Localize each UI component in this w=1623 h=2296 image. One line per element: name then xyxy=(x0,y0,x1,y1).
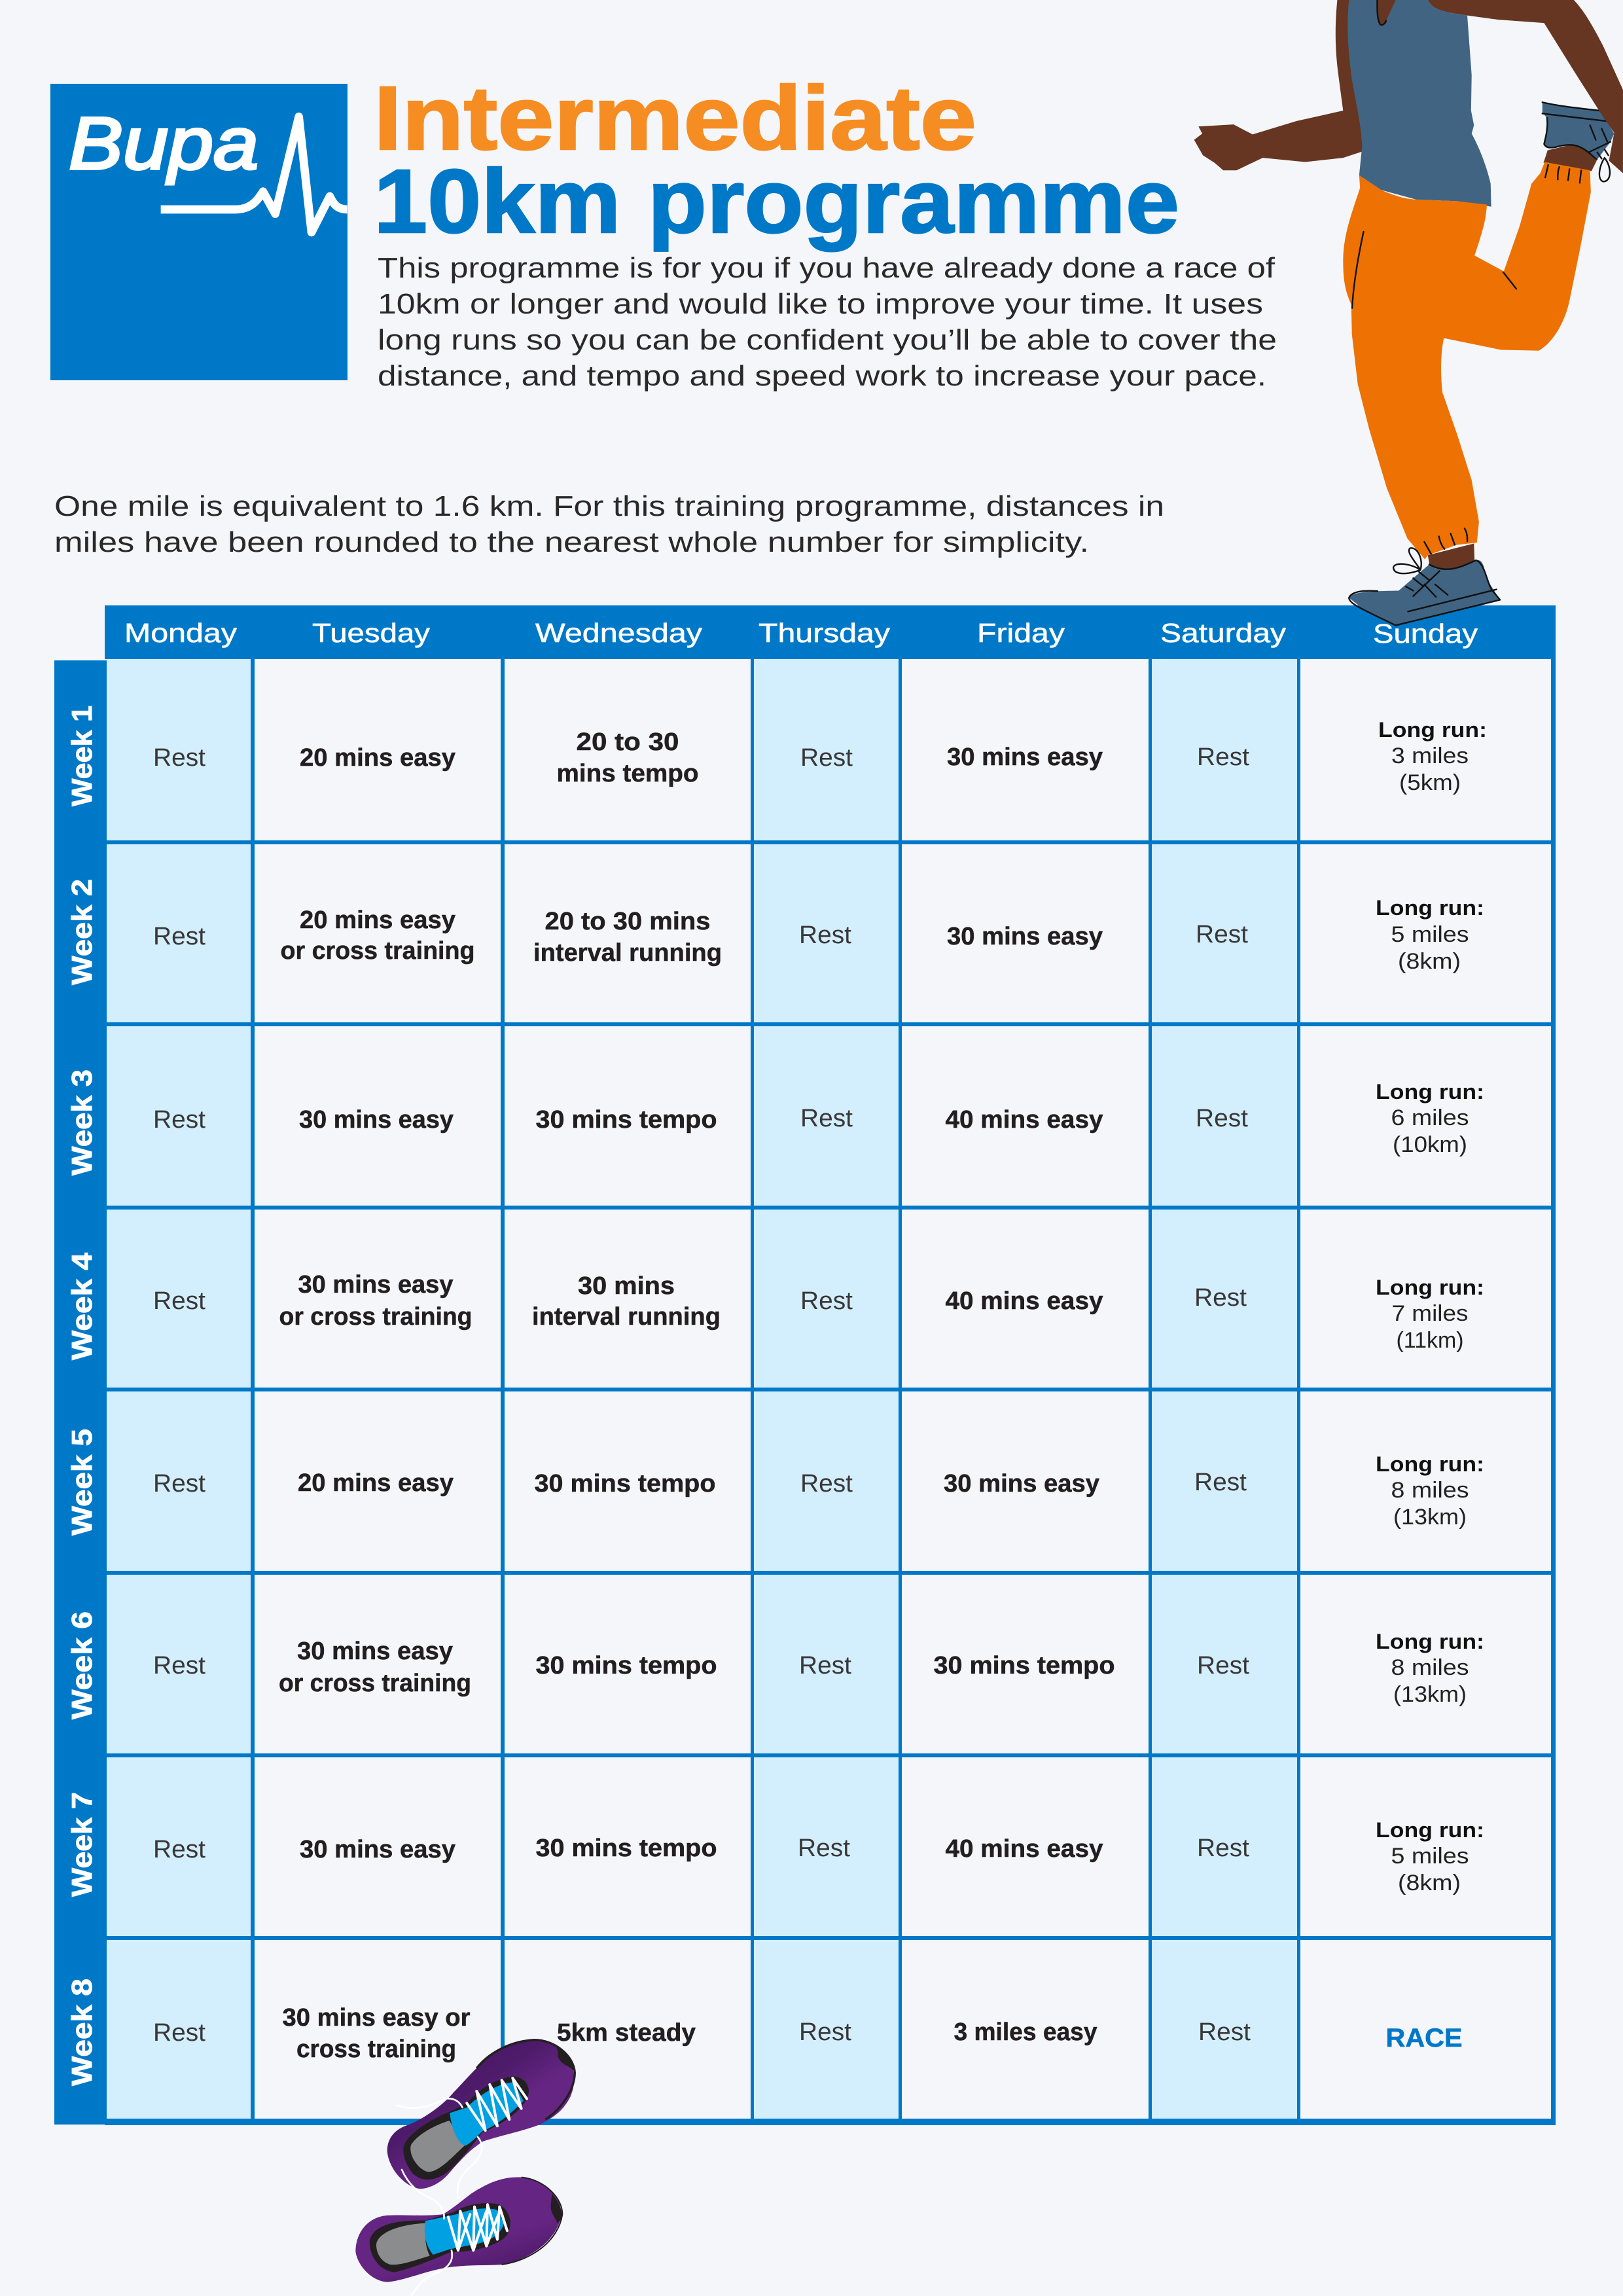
Sunday long run: (13km) xyxy=(1393,1505,1467,1530)
Thursday rest: Rest xyxy=(800,1105,853,1132)
Saturday rest: Rest xyxy=(1196,921,1248,948)
Tuesday session: or cross training xyxy=(279,1670,471,1697)
label: week 5: Week 5 xyxy=(66,1429,98,1535)
Wednesday session: interval running xyxy=(532,1303,721,1331)
Wednesday session xyxy=(532,1272,721,1331)
Sunday long run: 5 miles xyxy=(1391,922,1469,947)
title: Intermediate xyxy=(374,68,976,169)
label: week 8: Week 8 xyxy=(66,1979,98,2086)
Sunday long run: (11km) xyxy=(1397,1328,1463,1353)
day: Saturday: Saturday xyxy=(1160,618,1287,648)
Wednesday session xyxy=(533,908,722,967)
Wednesday session: 20 to 30 mins xyxy=(544,908,711,935)
day: Wednesday: Wednesday xyxy=(535,618,703,648)
intro text block: This programme is for you if you have already done a race of xyxy=(378,252,1275,284)
Tuesday session: 20 mins easy xyxy=(298,1469,454,1497)
day: Thursday: Thursday xyxy=(758,618,891,648)
Saturday rest: Rest xyxy=(1196,1105,1248,1132)
Tuesday session xyxy=(279,1638,471,1697)
Sunday long run: (8km) xyxy=(1398,1871,1461,1895)
label: week 6: Week 6 xyxy=(66,1611,98,1719)
Thursday rest: Rest xyxy=(800,1470,853,1498)
Wednesday session: mins tempo xyxy=(556,760,699,787)
Friday session: 30 mins easy xyxy=(947,744,1103,771)
row: week 5 xyxy=(153,1452,1484,1530)
row: week 2 xyxy=(153,896,1484,974)
label: week 4: Week 4 xyxy=(66,1252,98,1360)
intro text block: 10km or longer and would like to improve your time. It uses xyxy=(378,288,1263,320)
Thursday rest: Rest xyxy=(799,922,851,949)
Wednesday session: 30 mins tempo xyxy=(535,1106,717,1134)
runner: raised shoe xyxy=(1543,102,1614,181)
logo: Bupa: Bupa xyxy=(69,102,259,185)
Thursday rest: Rest xyxy=(800,744,853,772)
Friday session: 40 mins easy xyxy=(945,1106,1103,1134)
runner: chest and neck xyxy=(1369,0,1408,33)
Sunday long run xyxy=(1376,1630,1484,1707)
Monday rest: Rest xyxy=(153,744,205,772)
title: 10km programme xyxy=(374,151,1179,252)
Wednesday session: 30 mins tempo xyxy=(534,1470,716,1498)
Friday session: 30 mins easy xyxy=(947,923,1103,950)
Sunday long run: Long run: xyxy=(1376,1630,1484,1653)
title xyxy=(374,68,1179,252)
runner: orange trousers xyxy=(1343,162,1591,560)
distance note text block: miles have been rounded to the nearest whole number for simplicity. xyxy=(54,526,1089,558)
Sunday long run xyxy=(1376,896,1484,974)
Wednesday session: 30 mins tempo xyxy=(535,1835,717,1862)
Sunday long run: Long run: xyxy=(1376,1818,1484,1842)
Sunday long run xyxy=(1376,1818,1484,1895)
Saturday rest: Rest xyxy=(1194,1469,1247,1496)
runner: ankle xyxy=(1428,543,1474,572)
intro text block: distance, and tempo and speed work to increase your pace. xyxy=(378,360,1266,392)
runner: left arm and neck xyxy=(1194,0,1364,170)
Sunday long run: 8 miles xyxy=(1391,1478,1469,1503)
Sunday long run xyxy=(1376,1080,1484,1157)
runner: planted shoe xyxy=(1349,548,1500,625)
runner: vest xyxy=(1347,0,1491,207)
Monday rest: Rest xyxy=(153,923,205,950)
Thursday rest: Rest xyxy=(799,2018,851,2046)
Tuesday session: 30 mins easy xyxy=(297,1638,453,1665)
Tuesday session: or cross training xyxy=(279,1303,473,1331)
Saturday rest: Rest xyxy=(1197,1652,1249,1679)
Sunday long run: (8km) xyxy=(1398,949,1461,974)
Sunday long run: 7 miles xyxy=(1391,1301,1469,1326)
Tuesday session xyxy=(283,2004,471,2063)
day: Sunday: Sunday xyxy=(1373,619,1478,649)
Friday session: 3 miles easy xyxy=(954,2018,1097,2046)
Sunday race: RACE xyxy=(1386,2024,1462,2053)
illustration: running shoes xyxy=(355,2040,575,2296)
logo: Bupa xyxy=(50,84,348,380)
Sunday long run: (10km) xyxy=(1393,1132,1467,1157)
Friday session: 40 mins easy xyxy=(945,1287,1103,1315)
Monday rest: Rest xyxy=(153,1287,205,1315)
Friday session: 30 mins tempo xyxy=(933,1652,1115,1679)
runner: right arm xyxy=(1428,0,1623,173)
Tuesday session: 30 mins easy xyxy=(298,1271,453,1299)
row: week 4 xyxy=(153,1271,1484,1353)
Sunday long run: 8 miles xyxy=(1391,1655,1469,1680)
Sunday long run: Long run: xyxy=(1378,718,1487,742)
Monday rest: Rest xyxy=(153,2019,205,2047)
Sunday long run: Long run: xyxy=(1376,896,1484,920)
Sunday long run: 5 miles xyxy=(1391,1844,1469,1869)
label: week 2: Week 2 xyxy=(66,879,98,985)
upper shoe xyxy=(387,2040,575,2219)
Friday session: 30 mins easy xyxy=(944,1470,1099,1498)
Thursday rest: Rest xyxy=(798,1835,850,1862)
distance note text block: One mile is equivalent to 1.6 km. For this training programme, distances in xyxy=(54,490,1164,522)
Saturday rest: Rest xyxy=(1194,1284,1247,1312)
Sunday long run: 3 miles xyxy=(1391,744,1469,768)
Sunday long run: Long run: xyxy=(1376,1452,1484,1476)
Tuesday session: 20 mins easy xyxy=(300,906,455,934)
Sunday long run xyxy=(1378,718,1487,795)
distance note text block xyxy=(54,490,1164,558)
row: week 6 xyxy=(153,1630,1484,1707)
intro text block: long runs so you can be confident you’ll be able to cover the xyxy=(378,324,1277,356)
runner: neckline xyxy=(1377,0,1386,25)
Tuesday session: 30 mins easy or xyxy=(283,2004,471,2032)
Wednesday session: 20 to 30 xyxy=(576,728,679,756)
Saturday rest: Rest xyxy=(1197,744,1249,771)
Sunday long run: Long run: xyxy=(1376,1080,1484,1103)
label: week 7: Week 7 xyxy=(66,1792,98,1897)
Wednesday session: 30 mins tempo xyxy=(535,1652,717,1679)
row: week 7 xyxy=(153,1818,1484,1895)
Sunday long run: (13km) xyxy=(1393,1682,1467,1707)
illustration: runner xyxy=(1194,0,1623,625)
Wednesday session: interval running xyxy=(533,939,722,967)
day: Tuesday: Tuesday xyxy=(312,618,431,648)
training table grid xyxy=(105,655,1556,2125)
Monday rest: Rest xyxy=(153,1652,205,1679)
row: week 8 xyxy=(153,2004,1462,2063)
Tuesday session: cross training xyxy=(296,2036,456,2063)
Monday rest: Rest xyxy=(153,1470,205,1498)
week column xyxy=(54,660,107,2125)
runner: trouser seams xyxy=(1352,165,1581,554)
header row: days of the week xyxy=(105,605,1556,659)
Sunday long run: Long run: xyxy=(1376,1276,1484,1299)
Tuesday session xyxy=(280,906,475,965)
intro text block xyxy=(378,252,1277,392)
Sunday long run: (5km) xyxy=(1399,770,1461,795)
Tuesday session: 30 mins easy xyxy=(299,1106,454,1134)
Friday session: 40 mins easy xyxy=(945,1835,1103,1863)
Monday rest: Rest xyxy=(153,1836,205,1863)
Thursday rest: Rest xyxy=(799,1652,851,1679)
row: week 1 xyxy=(153,718,1487,795)
label: week 3: Week 3 xyxy=(66,1069,98,1175)
Tuesday session: or cross training xyxy=(280,937,475,965)
Sunday long run: 6 miles xyxy=(1391,1105,1469,1130)
day: Monday: Monday xyxy=(124,618,238,648)
Wednesday session xyxy=(556,728,699,787)
lower shoe xyxy=(355,2177,562,2296)
Tuesday session: 20 mins easy xyxy=(300,744,455,772)
Sunday long run xyxy=(1376,1276,1484,1353)
row: week 3 xyxy=(153,1080,1484,1157)
Saturday rest: Rest xyxy=(1198,2018,1251,2046)
Saturday rest: Rest xyxy=(1197,1835,1249,1862)
Wednesday session: 30 mins xyxy=(578,1272,675,1300)
Sunday long run xyxy=(1376,1452,1484,1530)
label: week 1: Week 1 xyxy=(66,706,98,806)
Thursday rest: Rest xyxy=(800,1287,853,1315)
Wednesday session: 5km steady xyxy=(557,2019,696,2047)
day: Friday: Friday xyxy=(977,618,1065,648)
Tuesday session: 30 mins easy xyxy=(300,1836,455,1863)
Monday rest: Rest xyxy=(153,1106,205,1134)
Tuesday session xyxy=(279,1271,473,1331)
runner: raised ankle xyxy=(1544,144,1597,171)
